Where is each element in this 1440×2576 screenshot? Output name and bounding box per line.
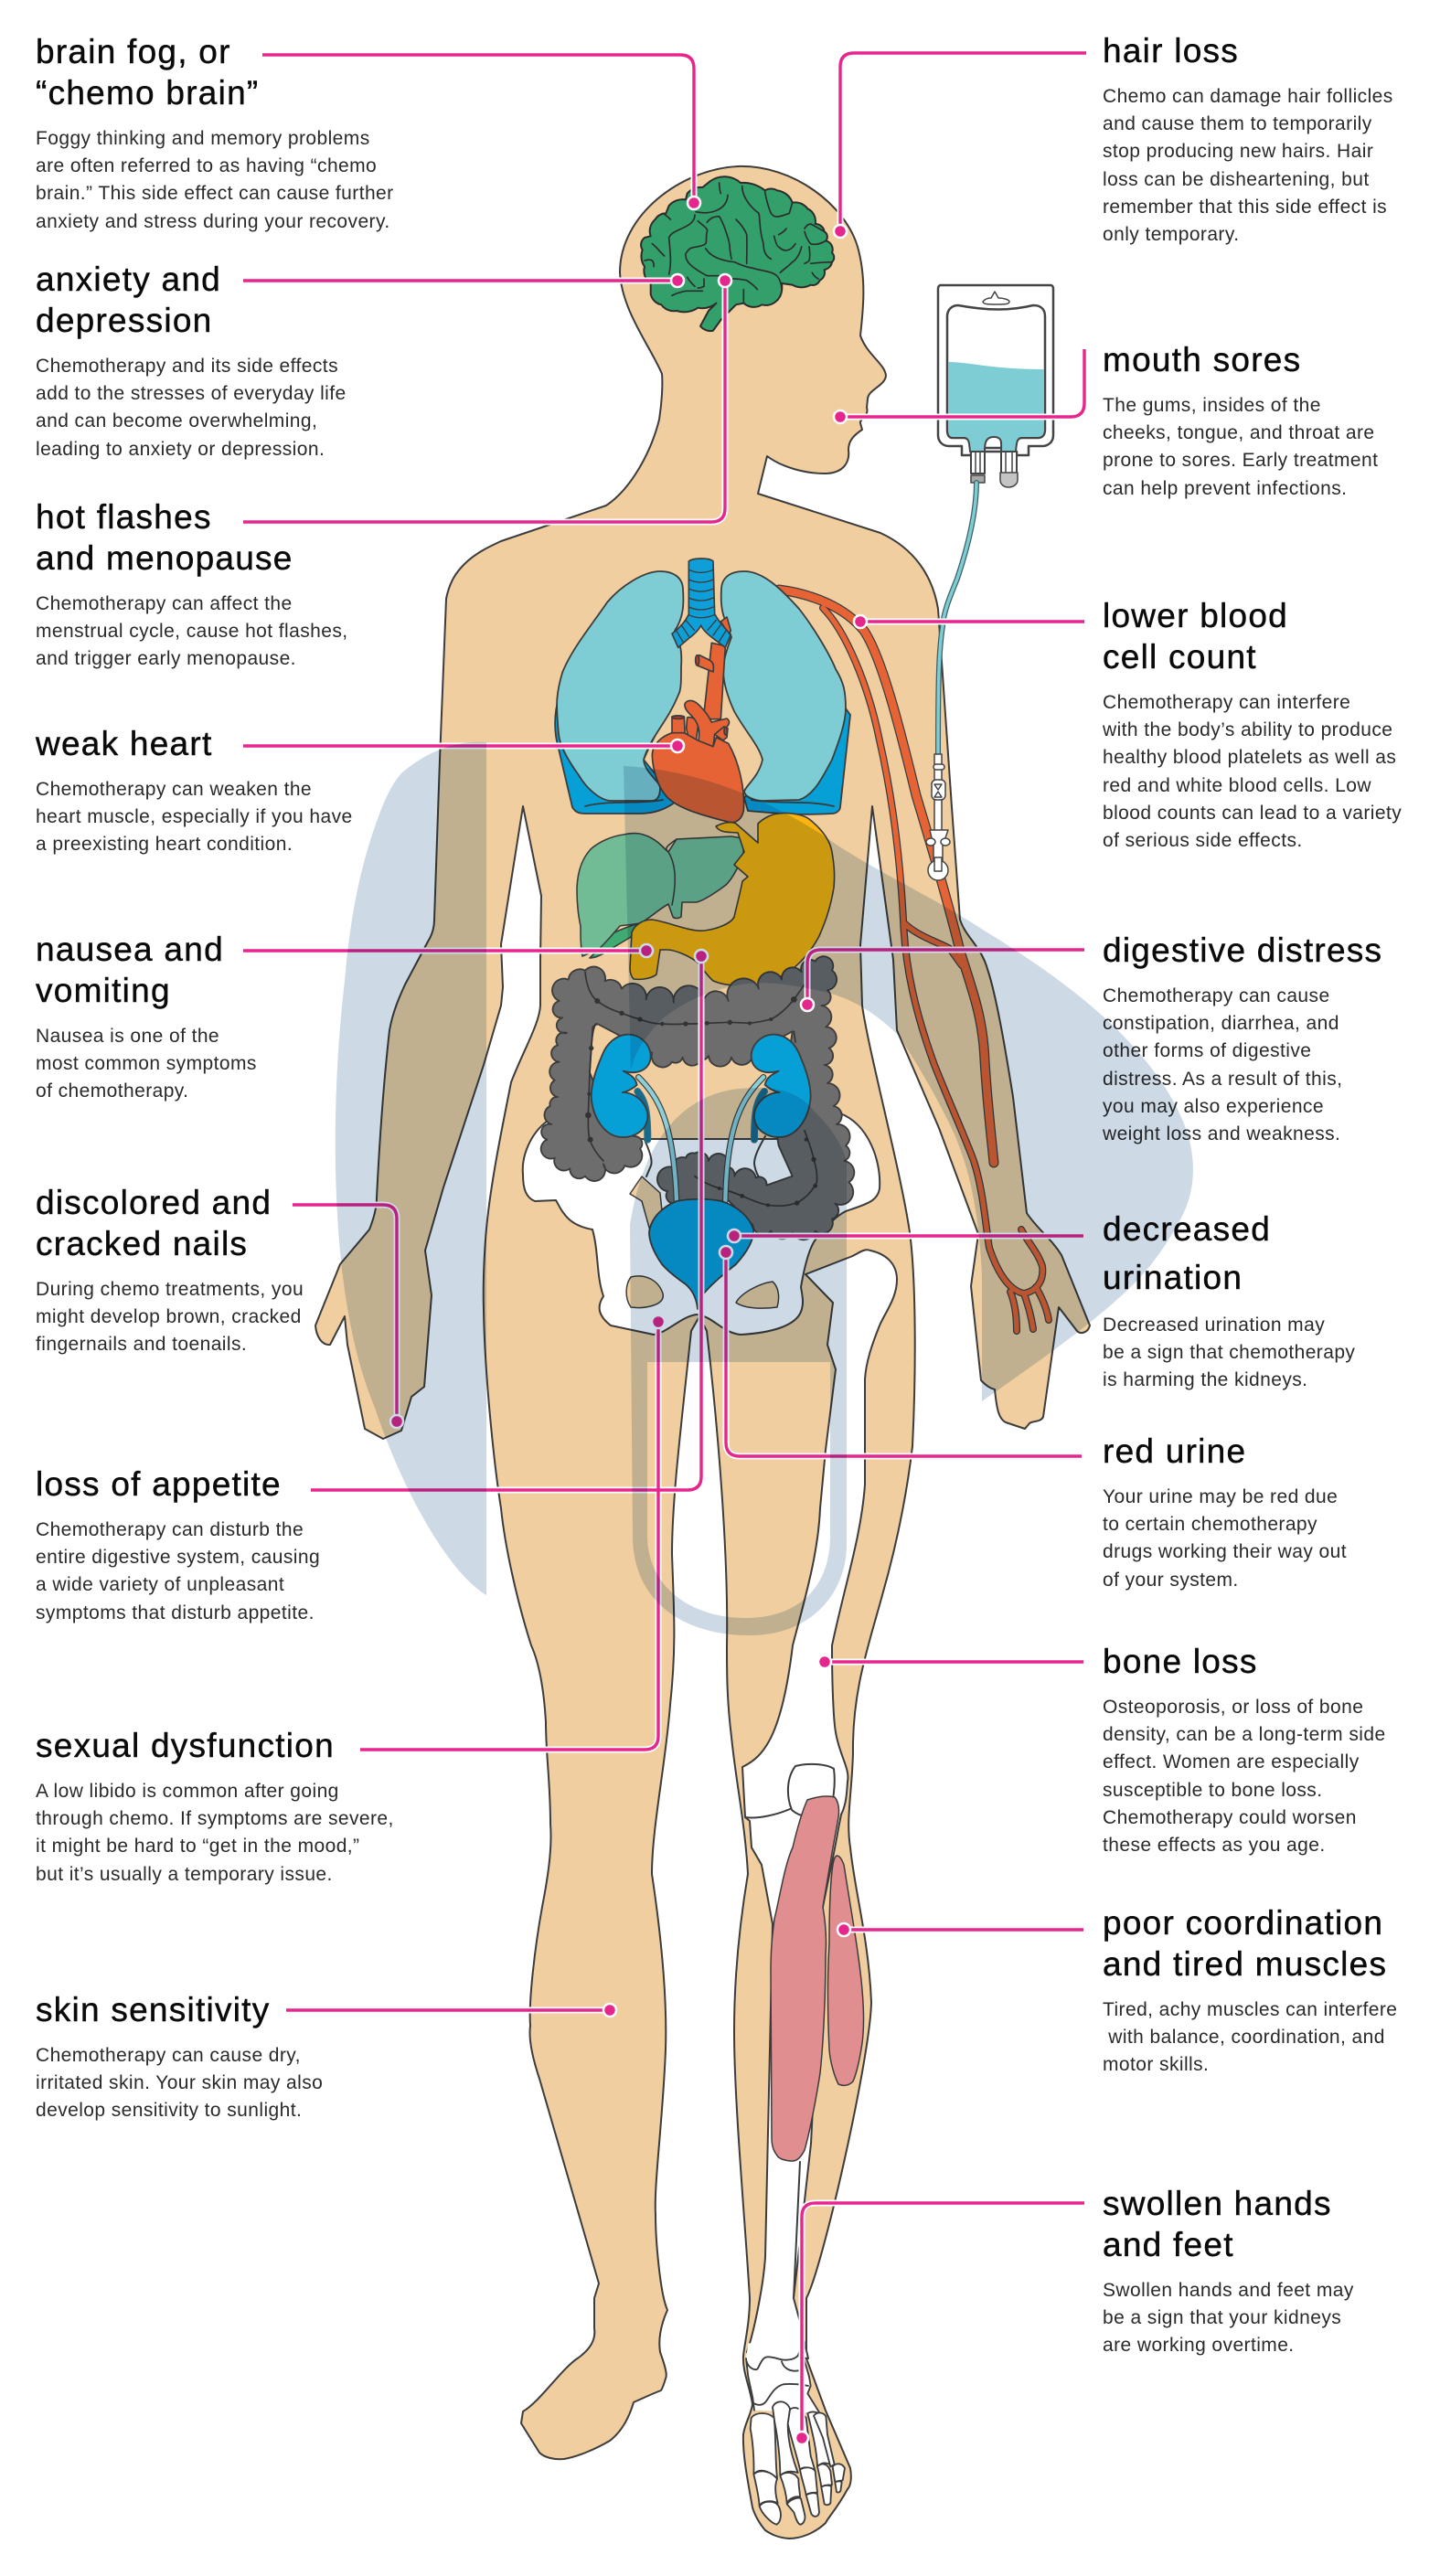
text: weak heart: Chemotherapy can weaken the xyxy=(36,779,312,800)
text: sexual dysfunction: through chemo. If symptoms are severe, xyxy=(36,1808,394,1829)
text: poor coordination: and tired muscles xyxy=(1103,1945,1387,1983)
text: sexual dysfunction: it might be hard to “get in the mood,” xyxy=(36,1836,359,1857)
text: bone loss: Osteoporosis, or loss of bone xyxy=(1103,1697,1363,1718)
text: sexual dysfunction: A low libido is common after going xyxy=(36,1781,339,1802)
text: decreased urination: decreased xyxy=(1103,1210,1271,1248)
text: bone loss: effect. Women are especially xyxy=(1103,1751,1360,1772)
text: red urine: of your system. xyxy=(1103,1570,1239,1591)
text: red urine: Your urine may be red due xyxy=(1103,1486,1338,1507)
text: anxiety and depression: anxiety and xyxy=(36,261,221,298)
text: decreased urination: be a sign that chemotherapy xyxy=(1103,1342,1355,1363)
text: skin sensitivity: develop sensitivity to sunlight. xyxy=(36,2100,302,2121)
IV drip bag xyxy=(926,285,1053,880)
lungs xyxy=(555,571,850,814)
text: nausea: Nausea is one of the xyxy=(36,1026,219,1047)
text: hair loss: loss can be disheartening, but xyxy=(1103,169,1370,190)
text: hair loss: stop producing new hairs. Hair xyxy=(1103,141,1373,162)
text: nausea: of chemotherapy. xyxy=(36,1080,188,1102)
text: loss of appetite: entire digestive system, causing xyxy=(36,1547,320,1568)
text: mouth sores: The gums, insides of the xyxy=(1103,395,1321,416)
text: red urine xyxy=(1103,1432,1347,1591)
liver xyxy=(577,834,743,958)
text: decreased urination: Decreased urination may xyxy=(1103,1315,1325,1336)
text: brain fog: anxiety and stress during your recovery. xyxy=(36,211,390,232)
text: mouth sores: can help prevent infections. xyxy=(1103,478,1347,499)
text: hot flashes: Chemotherapy can affect the xyxy=(36,593,293,614)
text: hot flashes: menstrual cycle, cause hot flashes, xyxy=(36,621,348,642)
kidneys and ureters xyxy=(592,1035,811,1200)
text: nausea: most common symptoms xyxy=(36,1053,257,1074)
text: nails: might develop brown, cracked xyxy=(36,1306,302,1327)
stomach xyxy=(630,813,835,985)
text: lower blood cell count: with the body’s ability to produce xyxy=(1103,719,1392,740)
text: bone loss: Chemotherapy could worsen xyxy=(1103,1807,1357,1828)
text: anxiety and depression: Chemotherapy and its side effects xyxy=(36,356,338,377)
text: brain fog: Foggy thinking and memory problems xyxy=(36,128,370,149)
text: nails xyxy=(36,1184,304,1355)
text: skin sensitivity: skin sensitivity xyxy=(36,1991,270,2028)
text: hot flashes: and menopause xyxy=(36,539,293,577)
text: hot flashes: hot flashes xyxy=(36,498,212,536)
text: sexual dysfunction: but it’s usually a temporary issue. xyxy=(36,1864,333,1885)
connector lines xyxy=(243,53,1086,2438)
text: lower blood cell count: lower blood xyxy=(1103,597,1288,634)
text: nails: fingernails and toenails. xyxy=(36,1334,247,1355)
text: hot flashes: and trigger early menopause. xyxy=(36,648,296,669)
text: hair loss xyxy=(1103,32,1393,245)
text: decreased urination xyxy=(1103,1210,1355,1390)
text: poor coordination: with balance, coordination, and xyxy=(1108,2027,1385,2048)
text: weak heart: weak heart xyxy=(36,725,212,762)
text: loss of appetite: symptoms that disturb appetite. xyxy=(36,1602,315,1623)
text: skin sensitivity xyxy=(36,1991,323,2121)
text: brain fog: are often referred to as having “chemo xyxy=(36,155,377,176)
bladder xyxy=(649,1199,753,1309)
brain xyxy=(641,176,834,331)
trachea and bronchi xyxy=(672,559,731,647)
text: digestive distress: other forms of digestive xyxy=(1103,1040,1311,1061)
leg muscles xyxy=(771,1796,863,2161)
text: bone loss: density, can be a long-term side xyxy=(1103,1724,1386,1745)
text: hair loss: Chemo can damage hair follicles xyxy=(1103,86,1393,107)
text: hair loss: remember that this side effect is xyxy=(1103,197,1387,218)
text: lower blood cell count: cell count xyxy=(1103,638,1257,676)
text: nausea: nausea and xyxy=(36,931,224,968)
text: brain fog: brain fog, or xyxy=(36,33,231,70)
text: nails: During chemo treatments, you xyxy=(36,1279,304,1300)
text: bone loss: bone loss xyxy=(1103,1643,1258,1680)
text: swollen hands and feet xyxy=(1103,2185,1354,2356)
text: lower blood cell count: healthy blood platelets as well as xyxy=(1103,747,1396,768)
connector dots xyxy=(390,197,867,2444)
text: swollen hands and feet: and feet xyxy=(1103,2226,1234,2263)
femur, knee and tibia bones xyxy=(742,1250,897,2358)
text: poor coordination: Tired, achy muscles can interfere xyxy=(1103,1999,1397,2020)
text: digestive distress: Chemotherapy can cause xyxy=(1103,985,1330,1006)
text: skin sensitivity: irritated skin. Your skin may also xyxy=(36,2072,323,2093)
text: nausea: vomiting xyxy=(36,972,171,1009)
text: weak heart xyxy=(35,725,353,855)
text: nails: discolored and xyxy=(36,1184,272,1221)
text: brain fog: brain.” This side effect can cause further xyxy=(36,183,394,204)
text: mouth sores xyxy=(1103,341,1378,499)
text: digestive distress: digestive distress xyxy=(1103,931,1382,969)
text: loss of appetite xyxy=(36,1465,320,1623)
text: swollen hands and feet: are working overtime. xyxy=(1103,2335,1295,2356)
text: red urine: to certain chemotherapy xyxy=(1103,1514,1317,1535)
text: lower blood cell count: red and white blood cells. Low xyxy=(1103,775,1371,796)
text: decreased urination: is harming the kidneys. xyxy=(1103,1369,1307,1390)
text: anxiety and depression: depression xyxy=(36,302,213,339)
blood vessels xyxy=(779,590,1049,1331)
text: loss of appetite: a wide variety of unpleasant xyxy=(36,1574,284,1595)
text: digestive distress: weight loss and weakness. xyxy=(1103,1123,1340,1144)
body silhouette xyxy=(315,166,1090,2539)
text: red urine: drugs working their way out xyxy=(1103,1541,1347,1562)
pelvis bone xyxy=(523,1113,880,1335)
text: digestive distress xyxy=(1103,931,1382,1144)
text: loss of appetite: loss of appetite xyxy=(36,1465,282,1503)
text: digestive distress: you may also experience xyxy=(1103,1096,1324,1117)
text: decreased urination: urination xyxy=(1103,1259,1243,1296)
text: anxiety and depression xyxy=(36,261,347,460)
text: poor coordination: poor coordination xyxy=(1103,1904,1383,1942)
text: anxiety and depression: leading to anxiety or depression. xyxy=(36,439,325,460)
aorta and heart xyxy=(652,617,744,823)
text: lower blood cell count: of serious side effects. xyxy=(1103,830,1303,851)
text: sexual dysfunction xyxy=(36,1727,394,1885)
IV tube xyxy=(938,483,976,754)
text: swollen hands and feet: be a sign that your kidneys xyxy=(1103,2307,1341,2328)
text: digestive distress: distress. As a result of this, xyxy=(1103,1069,1342,1090)
text: brain fog: “chemo brain” xyxy=(36,74,260,112)
text: mouth sores: cheeks, tongue, and throat are xyxy=(1103,422,1374,443)
text: lower blood cell count xyxy=(1103,597,1402,851)
text: hair loss: only temporary. xyxy=(1103,224,1239,245)
foot bones xyxy=(746,2343,845,2525)
text: skin sensitivity: Chemotherapy can cause dry, xyxy=(36,2045,301,2066)
text: brain fog xyxy=(36,33,394,232)
text: bone loss: these effects as you age. xyxy=(1103,1835,1326,1856)
text: sexual dysfunction: sexual dysfunction xyxy=(36,1727,335,1764)
text: poor coordination xyxy=(1103,1904,1397,2075)
text: hair loss: and cause them to temporarily xyxy=(1103,113,1372,134)
text: nails: cracked nails xyxy=(36,1225,248,1262)
text: digestive distress: constipation, diarrhea, and xyxy=(1103,1013,1339,1034)
colon xyxy=(541,956,854,1240)
text: lower blood cell count: blood counts can lead to a variety xyxy=(1103,803,1402,824)
text: bone loss: susceptible to bone loss. xyxy=(1103,1780,1322,1801)
text: poor coordination: motor skills. xyxy=(1103,2054,1209,2075)
text: lower blood cell count: Chemotherapy can interfere xyxy=(1103,692,1350,713)
text: hair loss: hair loss xyxy=(1103,32,1239,69)
text: red urine: red urine xyxy=(1103,1432,1246,1470)
text: anxiety and depression: and can become overwhelming, xyxy=(36,410,317,431)
text: swollen hands and feet: Swollen hands and feet may xyxy=(1103,2280,1354,2301)
text: swollen hands and feet: swollen hands xyxy=(1103,2185,1332,2222)
text: hot flashes xyxy=(36,498,348,669)
IV drip clamp xyxy=(926,754,950,880)
text: mouth sores: prone to sores. Early treatment xyxy=(1103,450,1378,471)
text: nausea xyxy=(35,931,257,1102)
text: mouth sores: mouth sores xyxy=(1103,341,1301,378)
text: weak heart: a preexisting heart condition. xyxy=(36,834,293,855)
text: anxiety and depression: add to the stresses of everyday life xyxy=(36,383,347,404)
text: weak heart: heart muscle, especially if you have xyxy=(36,806,353,827)
text: loss of appetite: Chemotherapy can disturb the xyxy=(36,1519,304,1540)
text: bone loss xyxy=(1103,1643,1386,1856)
